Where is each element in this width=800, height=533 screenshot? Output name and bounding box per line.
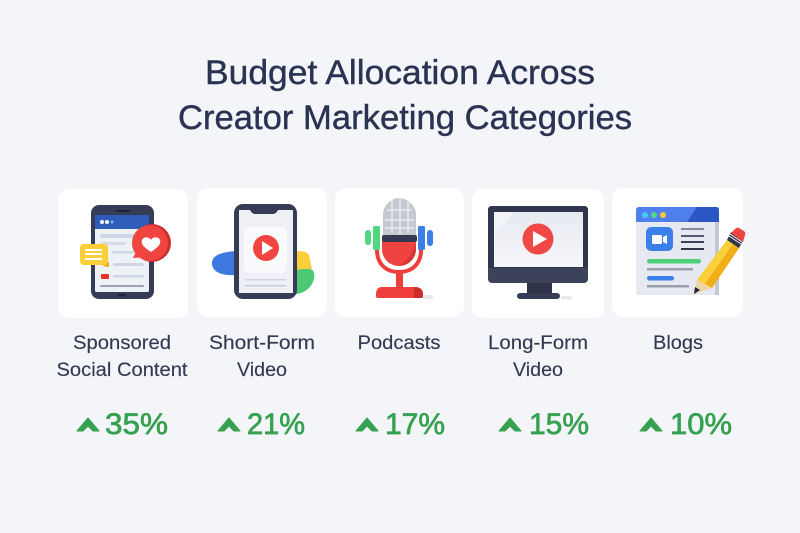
stat: 15%: 15%: [529, 408, 589, 441]
stat: 15%: [499, 408, 589, 441]
panel: podcasts: [335, 188, 464, 317]
stat: 10%: [640, 408, 732, 441]
label: blogs: Blogs: [653, 333, 703, 354]
stat: 35%: [77, 408, 168, 441]
label: sponsored social content: Social Content: [56, 360, 188, 381]
panel: short-form video: [197, 188, 327, 317]
title: Creator Marketing Categories: [178, 99, 632, 137]
stat: 10%: 10%: [670, 408, 732, 441]
card: blogs: [612, 188, 743, 317]
card: long-form video: [472, 189, 604, 318]
title: [178, 54, 632, 137]
icon: pencil: [694, 228, 745, 294]
label: podcasts: Podcasts: [358, 333, 440, 354]
label: sponsored social content: [56, 333, 188, 381]
label: short-form video: Video: [237, 360, 287, 381]
card: sponsored social content: [58, 189, 188, 318]
stat: 21%: [218, 408, 305, 441]
title: Budget Allocation Across: [205, 54, 595, 92]
icon: monitor with play button: [488, 206, 588, 300]
card: podcasts: [335, 188, 464, 317]
panel: long-form video: [472, 189, 604, 318]
label: sponsored social content: Sponsored: [73, 333, 171, 354]
label: short-form video: Short-Form: [209, 333, 315, 354]
card: short-form video: [197, 188, 327, 317]
label: long-form video: [488, 333, 588, 381]
icon: phone with play button: [212, 204, 314, 299]
panel: sponsored social content: [58, 189, 188, 318]
stat: 35%: 35%: [105, 408, 168, 441]
panel: blogs: [612, 188, 745, 317]
icon: phone with chat bubbles: [80, 205, 171, 299]
stat: 21%: 21%: [247, 408, 305, 441]
label: short-form video: [209, 333, 315, 381]
stat: 17%: 17%: [385, 408, 445, 441]
label: long-form video: Long-Form: [488, 333, 588, 354]
icon: microphone: [365, 198, 433, 299]
stat: 17%: [356, 408, 445, 441]
icon: web page with pencil: [636, 207, 745, 295]
label: long-form video: Video: [513, 360, 563, 381]
